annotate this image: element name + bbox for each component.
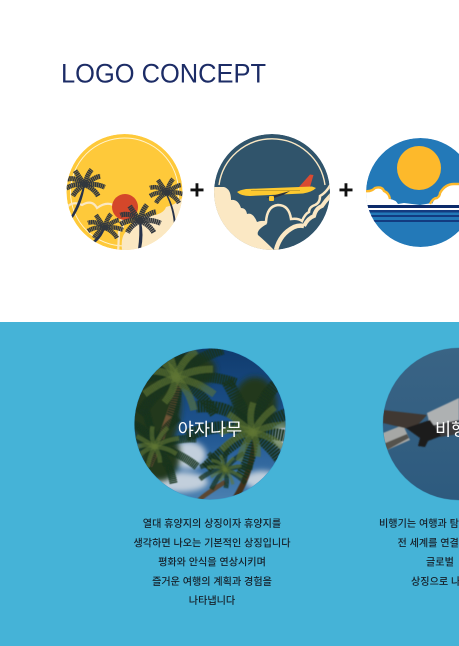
icon: airplane over clouds logo (205, 134, 332, 250)
plus sign: + (189, 174, 205, 204)
title: LOGO CONCEPT (61, 58, 266, 88)
plus sign: + (338, 174, 354, 204)
text block: airplane description: 글로벌 (426, 556, 454, 568)
airplane (237, 174, 316, 201)
text block: airplane description: 상징으로 나 (411, 575, 459, 588)
photo circle: airplane (380, 345, 459, 505)
text block: palm description: 평화와 안식을 연상시키며 (158, 556, 266, 568)
dark foliage mass on the left (129, 352, 277, 481)
icon: palm tree and sunset logo (66, 134, 182, 250)
text block: airplane description: 비행기는 여행과 탐 (379, 517, 459, 530)
text block: palm description: 생각하면 나오는 기본적인 상징입니다 (134, 536, 291, 550)
text block: palm description: 즐거운 여행의 계획과 경험을 (152, 575, 272, 588)
text block: palm description: 나타냅니다 (189, 595, 236, 607)
text block: airplane description: 전 세계를 연결 (398, 536, 459, 550)
text block: palm description (134, 517, 291, 607)
text block: airplane description (379, 517, 459, 588)
text block: palm description: 열대 휴양지의 상징이자 휴양지를 (143, 517, 281, 530)
icon: sun and sea logo (360, 138, 459, 247)
photo circle: palm trees (134, 348, 286, 500)
panel: blue section (0, 322, 459, 646)
label: palm: 야자나무 (178, 420, 242, 440)
